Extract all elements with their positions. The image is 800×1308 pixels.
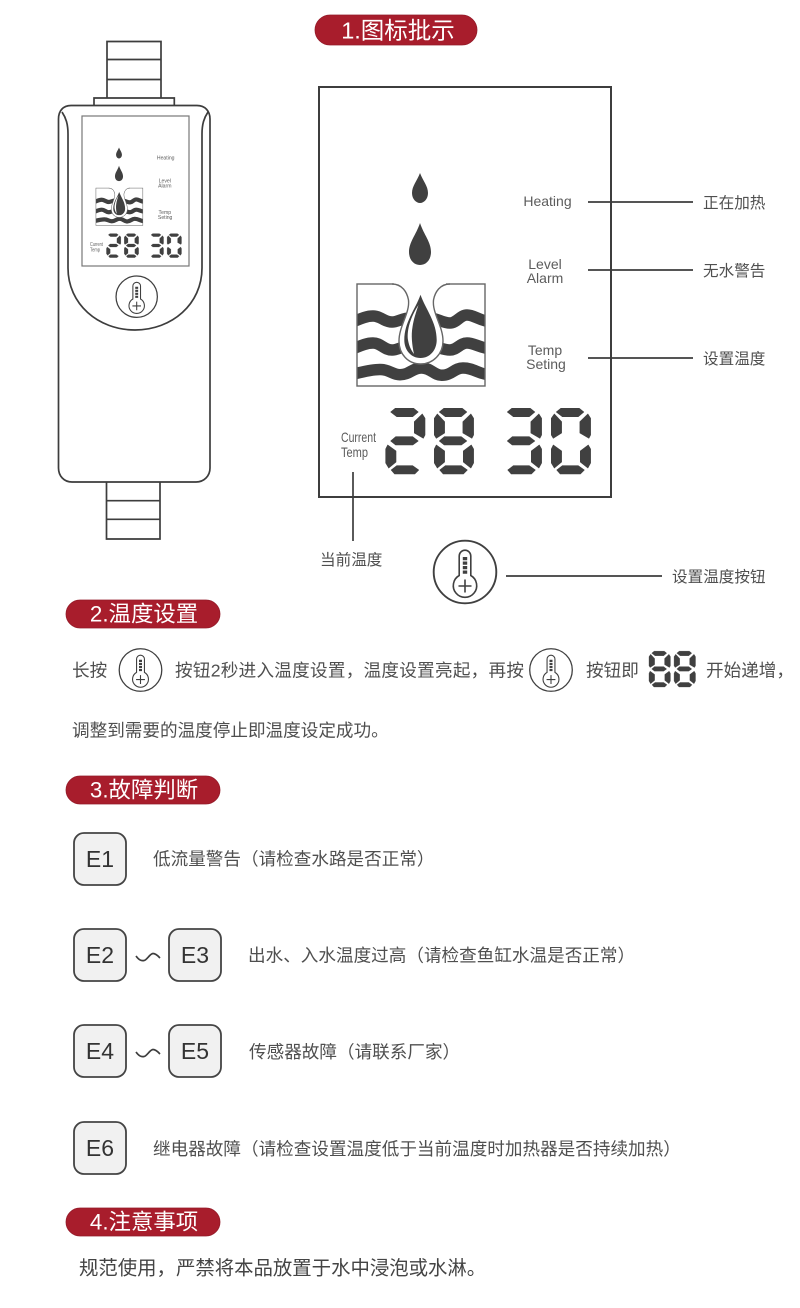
fault row: E4 to E5	[74, 1025, 460, 1077]
fault row: E1: E1	[86, 846, 114, 872]
heading: 1	[315, 15, 477, 45]
heading: 3: 3.故障判断	[90, 778, 198, 802]
fault row: E2 to E3	[74, 929, 635, 981]
text block: temperature setting instructions: 调整到需要的温度停止即温度设定成功。	[72, 720, 389, 740]
text block: temperature setting instructions: 开始递增，	[706, 660, 794, 680]
fault row: E6	[74, 1122, 681, 1174]
fault row: E2 to E3: E2	[86, 942, 114, 968]
heading: 2	[66, 600, 220, 628]
callout: temp setting: 设置温度	[703, 350, 765, 368]
text block: temperature setting instructions: 按钮2秒进入温度设置，温度设置亮起，再按	[175, 660, 524, 680]
icon: thermometer	[530, 649, 572, 691]
fault row: E2 to E3: 出水、入水温度过高（请检查鱼缸水温是否正常）	[248, 946, 635, 966]
text block: precautions: 规范使用，严禁将本品放置于水中浸泡或水淋。	[79, 1258, 486, 1280]
heading: 3	[66, 776, 220, 804]
small LCD panel	[82, 116, 189, 266]
heading: 4: 4.注意事项	[90, 1210, 198, 1234]
top connector	[94, 42, 174, 106]
fault row: E6: 继电器故障（请检查设置温度低于当前温度时加热器是否持续加热）	[153, 1139, 681, 1159]
icon: thermometer	[119, 649, 162, 691]
fault row: E1: 低流量警告（请检查水路是否正常）	[153, 849, 435, 869]
device body	[58, 106, 210, 482]
fault row: E4 to E5: 传感器故障（请联系厂家）	[249, 1042, 460, 1062]
text block: temperature setting instructions: 长按	[72, 660, 107, 680]
fault row: E1	[74, 833, 435, 885]
heading: 1: 1.图标批示	[341, 18, 455, 44]
fault row: E2 to E3: E3	[181, 942, 209, 968]
icon: small thermometer button	[116, 276, 157, 317]
text block: temperature setting instructions	[72, 649, 794, 740]
device illustration	[58, 42, 210, 539]
heading: 4	[66, 1208, 220, 1236]
panel: enlarged LCD	[319, 87, 611, 497]
fault row: E4 to E5: E5	[181, 1038, 209, 1064]
callout: current temperature: 当前温度	[320, 551, 382, 569]
callout: heating: 正在加热	[703, 194, 766, 212]
callout: temperature button	[434, 541, 766, 603]
text block: temperature setting instructions: 按钮即	[586, 660, 639, 680]
heading: 2: 2.温度设置	[90, 602, 198, 626]
icon: LCD digits	[649, 651, 695, 687]
front panel outline	[62, 112, 208, 330]
fault row: E4 to E5: E4	[86, 1038, 114, 1064]
callout: current temperature	[320, 472, 382, 569]
fault row: E6: E6	[86, 1135, 114, 1161]
bottom connector	[106, 482, 160, 539]
callout: level alarm: 无水警告	[703, 262, 765, 280]
callout: temperature button: 设置温度按钮	[672, 568, 766, 586]
